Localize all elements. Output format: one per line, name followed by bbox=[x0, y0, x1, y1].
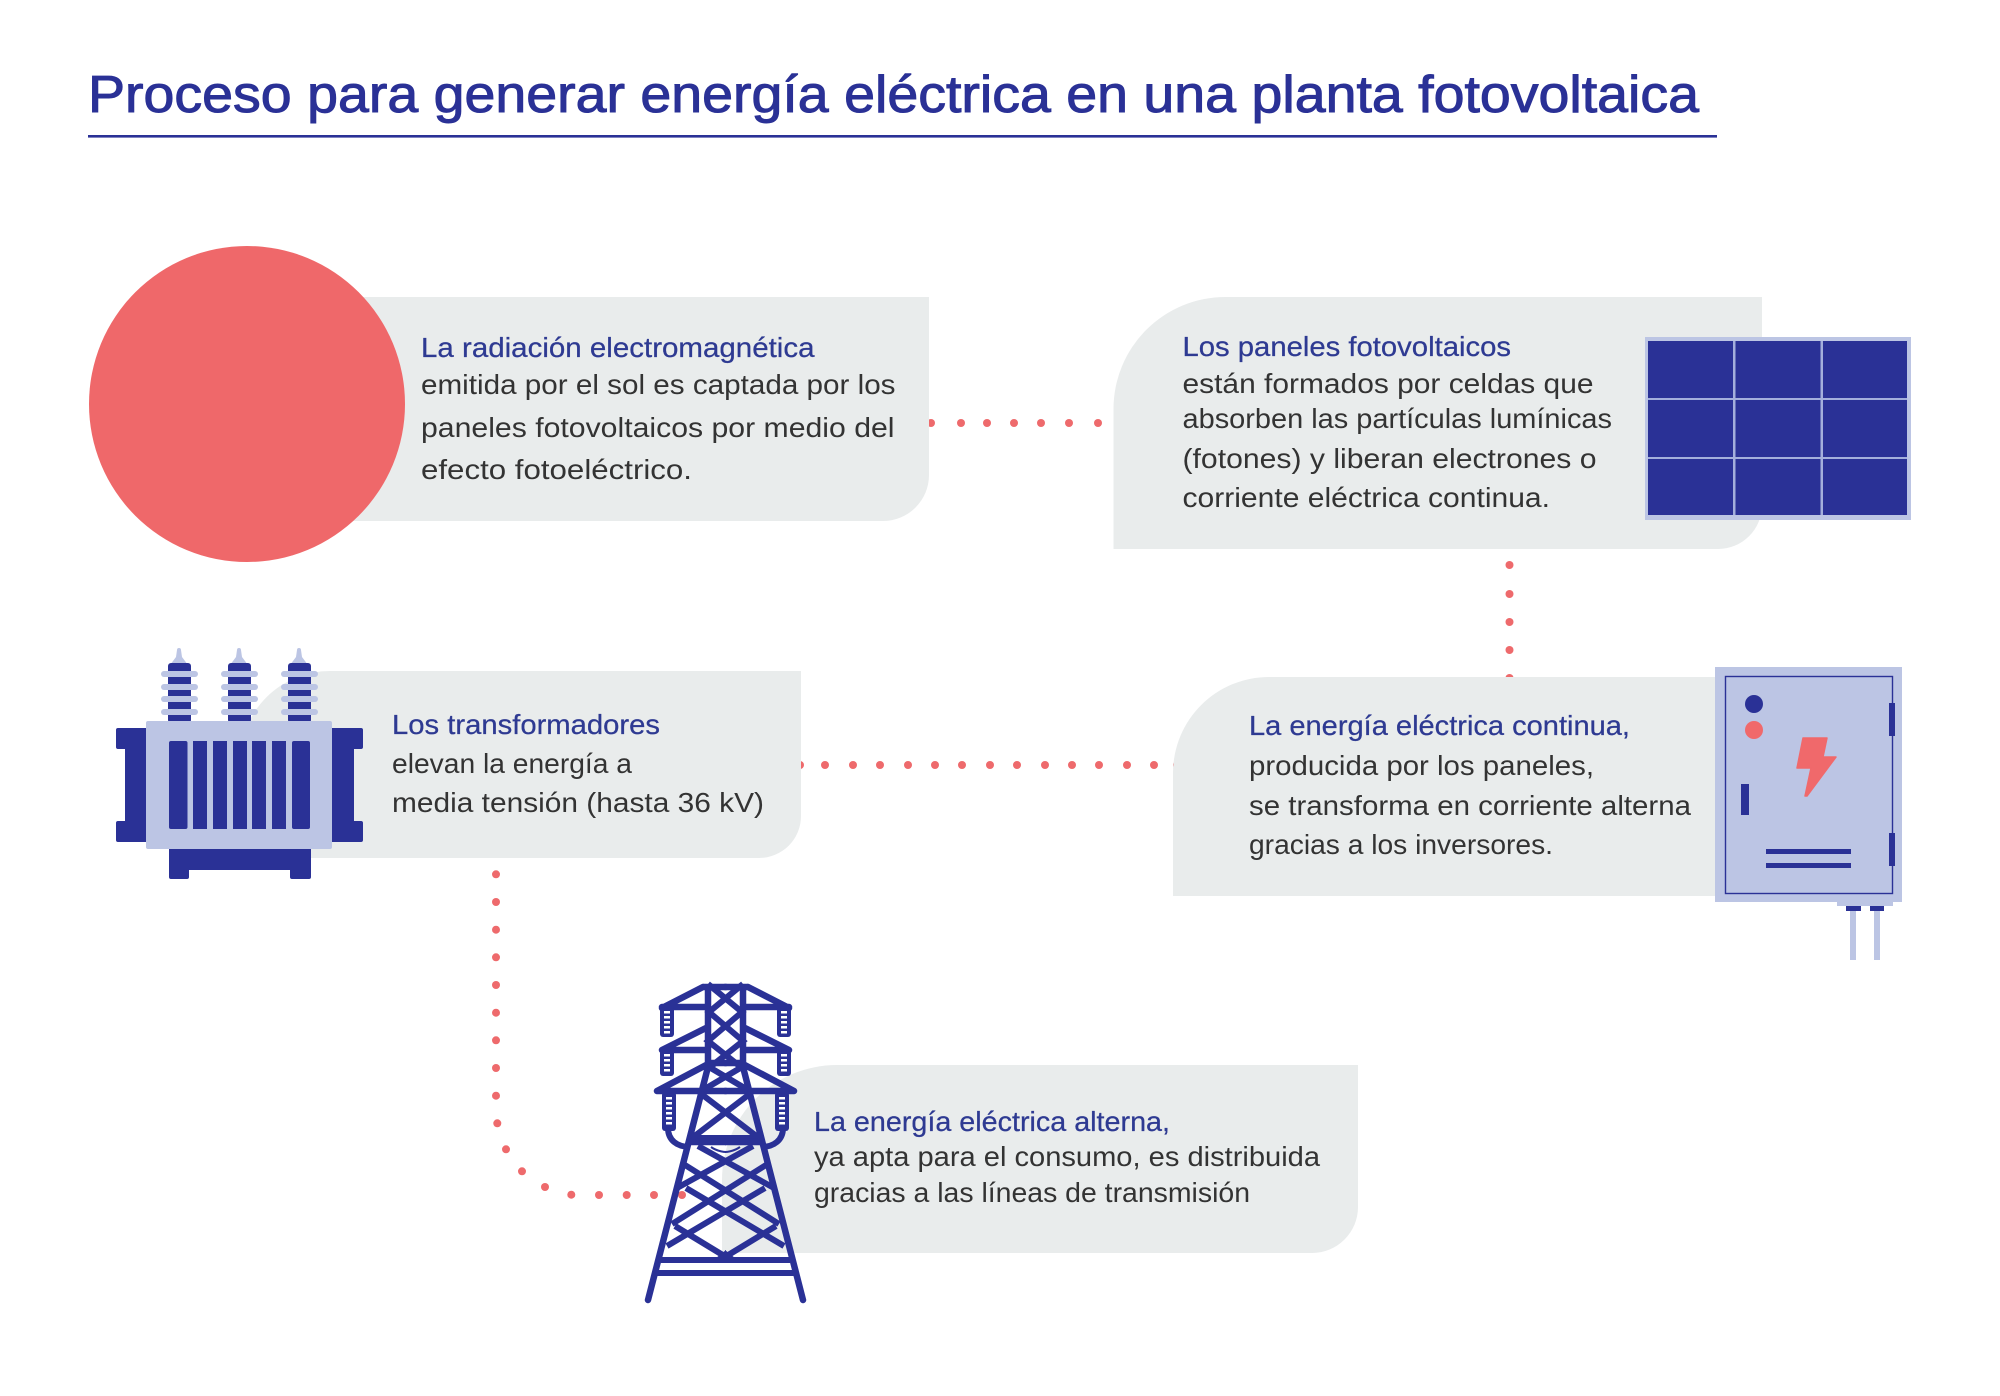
text: direct current: gracias a los inversores. bbox=[1249, 829, 1553, 860]
text: transformers: elevan la energía a bbox=[392, 748, 632, 779]
text: alternating current: La energía eléctrica alterna, bbox=[814, 1106, 1170, 1137]
icon: transmission tower bbox=[648, 984, 803, 1300]
panel: distribution background bbox=[722, 1065, 1358, 1253]
connector: inverter to transformer bbox=[796, 761, 1181, 769]
side radiators and base bbox=[116, 728, 150, 842]
text: photovoltaic panels: están formados por celdas que bbox=[1182, 368, 1594, 399]
text: photovoltaic panels: (fotones) y liberan electrones o bbox=[1182, 443, 1596, 474]
text: photovoltaic panels: absorben las partículas lumínicas bbox=[1182, 403, 1612, 434]
connector: transformer to tower bbox=[492, 870, 686, 1199]
text: photovoltaic panels: Los paneles fotovoltaicos bbox=[1182, 331, 1511, 362]
panel: transformer background bbox=[240, 671, 801, 858]
text: radiation: emitida por el sol es captada por los bbox=[421, 369, 896, 400]
text: direct current: se transforma en corriente alterna bbox=[1249, 790, 1691, 821]
text: alternating current bbox=[814, 1106, 1320, 1208]
text: direct current bbox=[1249, 710, 1691, 860]
text: direct current: La energía eléctrica continua, bbox=[1249, 710, 1630, 741]
text: direct current: producida por los paneles, bbox=[1249, 750, 1594, 781]
panel: inverter background bbox=[1173, 677, 1720, 896]
text: photovoltaic panels bbox=[1182, 331, 1612, 513]
text: radiation: La radiación electromagnética bbox=[421, 332, 815, 363]
text: transformers bbox=[392, 709, 764, 818]
connector: radiation to panels bbox=[927, 419, 1102, 427]
text: alternating current: gracias a las líneas de transmisión bbox=[814, 1177, 1250, 1208]
text: transformers: Los transformadores bbox=[392, 709, 660, 740]
panel: radiation background bbox=[340, 297, 929, 521]
icon: sun bbox=[89, 246, 405, 562]
text: radiation bbox=[421, 332, 896, 485]
title: Proceso para generar energía eléctrica en una planta fotovoltaica bbox=[88, 66, 1699, 124]
panel: photovoltaic background bbox=[1114, 297, 1762, 549]
icon: solar panel bbox=[1645, 337, 1911, 520]
connector: panels to inverter bbox=[1506, 561, 1514, 682]
text: transformers: media tensión (hasta 36 kV) bbox=[392, 787, 764, 818]
icon: inverter box bbox=[1715, 667, 1902, 960]
text: alternating current: ya apta para el consumo, es distribuida bbox=[814, 1141, 1320, 1172]
text: photovoltaic panels: corriente eléctrica continua. bbox=[1182, 482, 1550, 513]
text: radiation: efecto fotoeléctrico. bbox=[421, 454, 692, 485]
bushings bbox=[161, 648, 318, 723]
icon: transformer bbox=[116, 648, 363, 879]
text: radiation: paneles fotovoltaicos por medio del bbox=[421, 412, 894, 443]
